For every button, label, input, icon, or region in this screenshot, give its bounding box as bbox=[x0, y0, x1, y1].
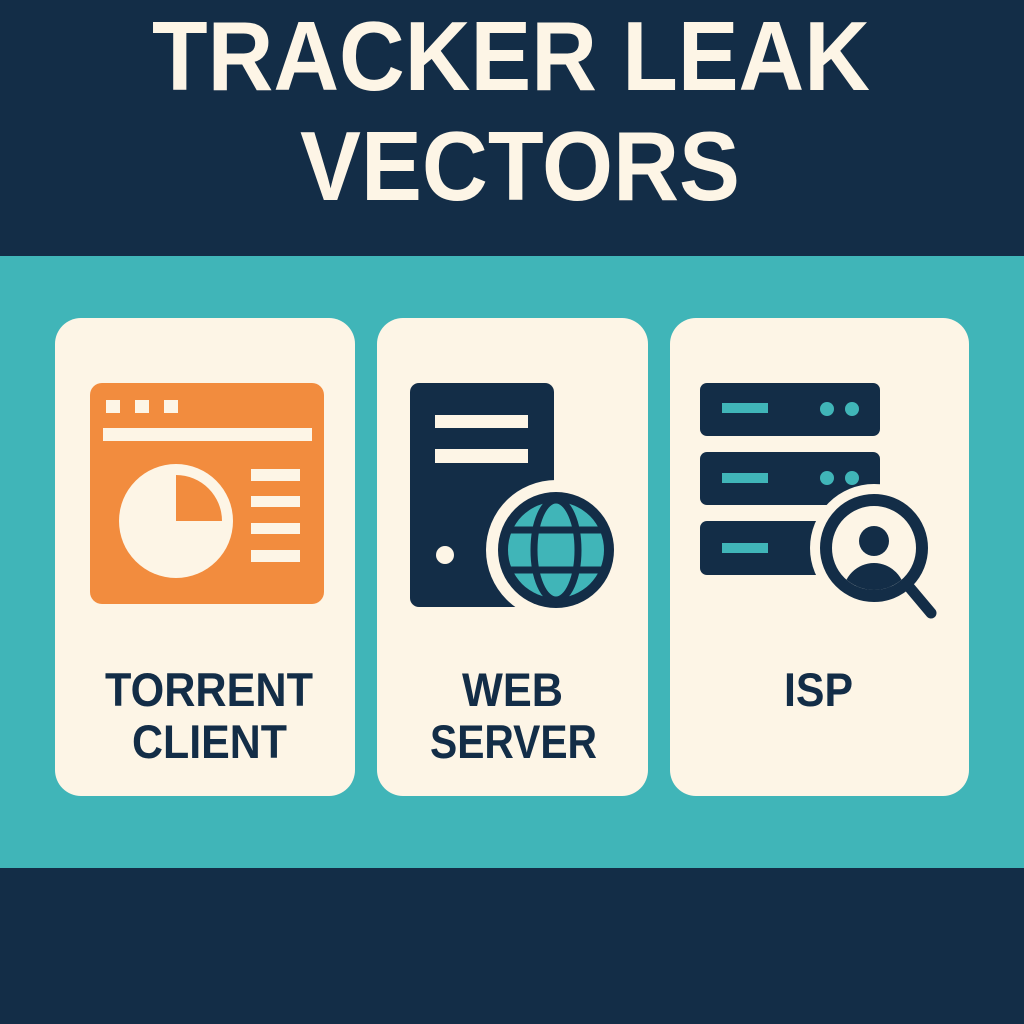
label: torrent client: TORRENT bbox=[105, 663, 313, 716]
icon: torrent client window bbox=[90, 383, 324, 604]
label: web server: SERVER bbox=[430, 715, 597, 768]
title: VECTORS bbox=[300, 111, 740, 221]
panel: web server bbox=[377, 318, 648, 796]
title: TRACKER LEAK bbox=[152, 1, 870, 111]
title bbox=[152, 1, 870, 221]
label: isp: ISP bbox=[784, 663, 853, 716]
panel: torrent client bbox=[55, 318, 355, 796]
label: torrent client: CLIENT bbox=[132, 715, 287, 768]
label: web server: WEB bbox=[462, 663, 563, 716]
label: web server bbox=[430, 663, 597, 768]
panel: isp bbox=[670, 318, 969, 796]
icon: server rack with magnifier bbox=[700, 383, 938, 625]
icon: server tower with globe bbox=[410, 383, 626, 620]
label: torrent client bbox=[105, 663, 313, 768]
